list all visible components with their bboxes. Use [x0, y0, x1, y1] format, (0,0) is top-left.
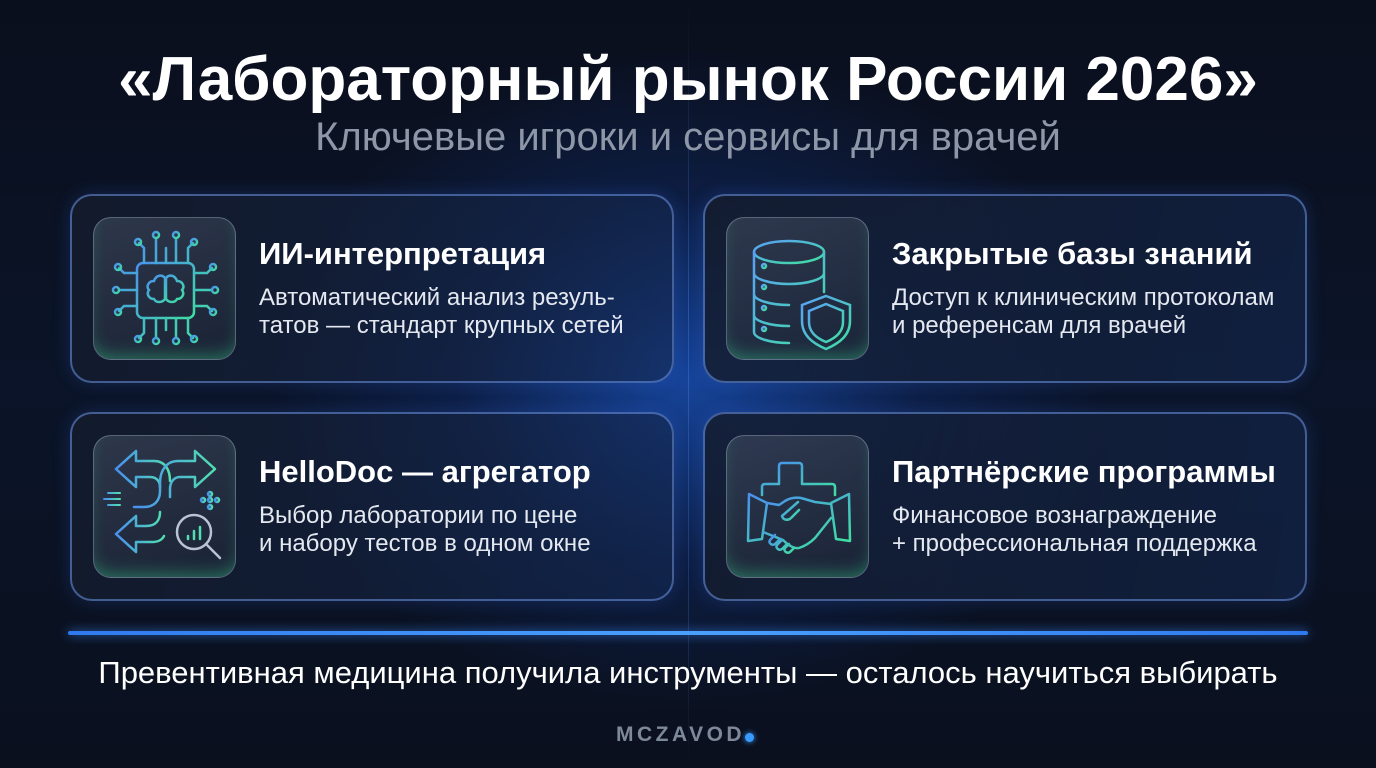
text: и набору тестов в одном окне — [259, 530, 591, 557]
panel: closed knowledge bases — [703, 194, 1307, 383]
text: и референсам для врачей — [892, 312, 1186, 339]
panel: HelloDoc aggregator — [70, 412, 674, 601]
text: Доступ к клиническим протоколам — [892, 284, 1274, 311]
divider line — [68, 631, 1308, 635]
panel: partner programs — [703, 412, 1307, 601]
title: «Лабораторный рынок России 2026» — [118, 45, 1258, 114]
text: татов — стандарт крупных сетей — [259, 312, 624, 339]
text: Автоматический анализ резуль- — [259, 284, 615, 311]
logo: MCZAVOD: MCZAVOD — [616, 723, 745, 746]
icon: database with shield — [726, 217, 869, 360]
icon: AI chip brain — [93, 217, 236, 360]
conclusion text: Превентивная медицина получила инструменты — осталось научиться выбирать — [98, 655, 1278, 690]
heading: HelloDoc — агрегатор — [259, 454, 591, 489]
panel: AI interpretation — [70, 194, 674, 383]
subtitle: Ключевые игроки и сервисы для врачей — [315, 115, 1061, 159]
text — [892, 284, 1274, 339]
heading: Партнёрские программы — [892, 454, 1276, 489]
heading: Закрытые базы знаний — [892, 236, 1253, 271]
text: + профессиональная поддержка — [892, 530, 1257, 557]
text: Финансовое вознаграждение — [892, 502, 1217, 529]
text: Выбор лаборатории по цене — [259, 502, 577, 529]
icon: handshake with cross — [726, 435, 869, 578]
text — [259, 502, 591, 557]
text — [259, 284, 624, 339]
heading: ИИ-интерпретация — [259, 236, 546, 271]
text — [892, 502, 1257, 557]
icon: arrows with magnifier — [93, 435, 236, 578]
